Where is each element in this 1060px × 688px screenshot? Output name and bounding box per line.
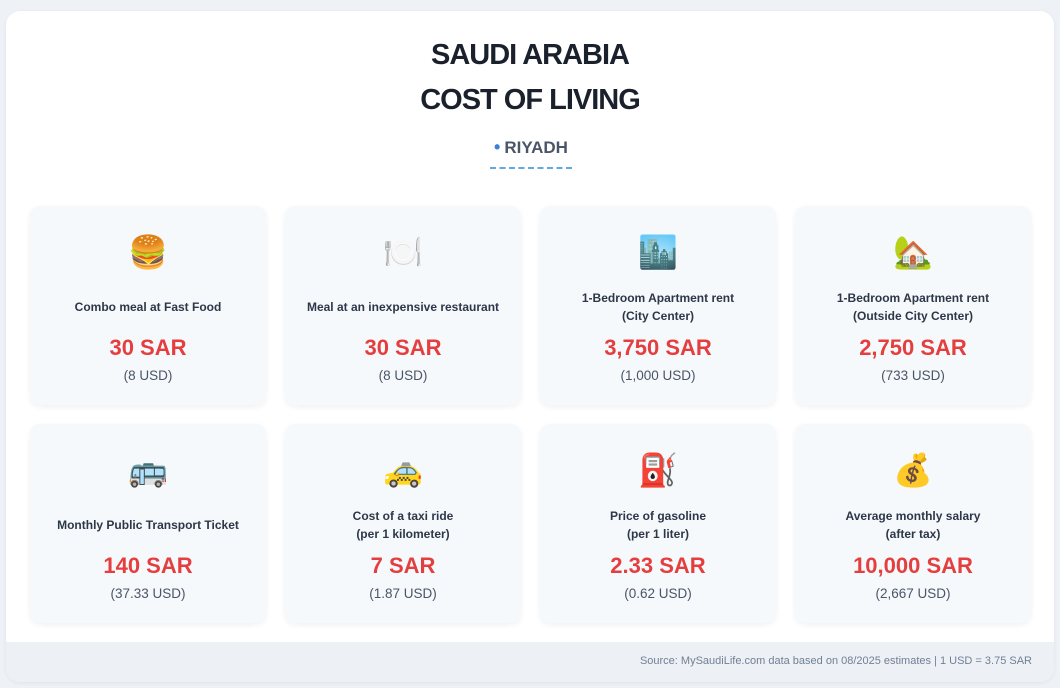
label: Average monthly salary [846,509,980,523]
icon: fuel pump: ⛽ [638,451,678,489]
subtitle: city [490,137,572,169]
icon: bus: 🚌 [128,451,168,489]
value: 3,750 SAR [604,335,712,360]
icon: city: 🏙️ [638,233,678,271]
card: gasoline [540,424,776,623]
label: Price of gasoline [610,509,706,523]
label: (City Center) [622,309,694,323]
label: (per 1 kilometer) [356,527,450,541]
icon: plate: 🍽️ [383,233,423,271]
label [837,291,989,323]
label [846,509,980,541]
title line 2: COST OF LIVING [420,84,640,116]
label: (per 1 liter) [627,527,689,541]
icon: burger: 🍔 [128,233,168,271]
value: 30 SAR [109,335,187,360]
card: salary [795,424,1031,623]
card: taxi [285,424,521,623]
usd: (0.62 USD) [624,586,692,601]
label: Monthly Public Transport Ticket [57,518,239,532]
subtitle: city: •RIYADH [494,137,568,157]
usd: (8 USD) [124,368,172,383]
title line 1: SAUDI ARABIA [431,39,629,71]
card: rent outside [795,206,1031,405]
usd: (1.87 USD) [369,586,437,601]
usd: (37.33 USD) [110,586,186,601]
icon: money bag: 💰 [893,451,933,489]
label: Meal at an inexpensive restaurant [307,300,499,314]
card: rent city center [540,206,776,405]
label [610,509,706,541]
label: 1-Bedroom Apartment rent [582,291,734,305]
usd: (8 USD) [379,368,427,383]
icon: taxi: 🚕 [383,451,423,489]
icon: house: 🏡 [893,233,933,271]
usd: (2,667 USD) [875,586,951,601]
value: 10,000 SAR [853,553,973,578]
footer: source: Source: MySaudiLife.com data based on 08/2025 estimates | 1 USD = 3.75 SAR [640,655,1032,667]
label [353,509,453,541]
card: transport [30,424,266,623]
value: 30 SAR [364,335,442,360]
label: Cost of a taxi ride [353,509,453,523]
value: 140 SAR [103,553,193,578]
label: 1-Bedroom Apartment rent [837,291,989,305]
value: 2,750 SAR [859,335,967,360]
usd: (1,000 USD) [620,368,696,383]
label: (after tax) [886,527,940,541]
card: fast food [30,206,266,405]
label: (Outside City Center) [853,309,973,323]
card: restaurant [285,206,521,405]
label: Combo meal at Fast Food [75,300,221,314]
footer: source [6,642,1054,682]
usd: (733 USD) [881,368,945,383]
value: 7 SAR [371,553,435,578]
value: 2.33 SAR [610,553,706,578]
label [582,291,734,323]
